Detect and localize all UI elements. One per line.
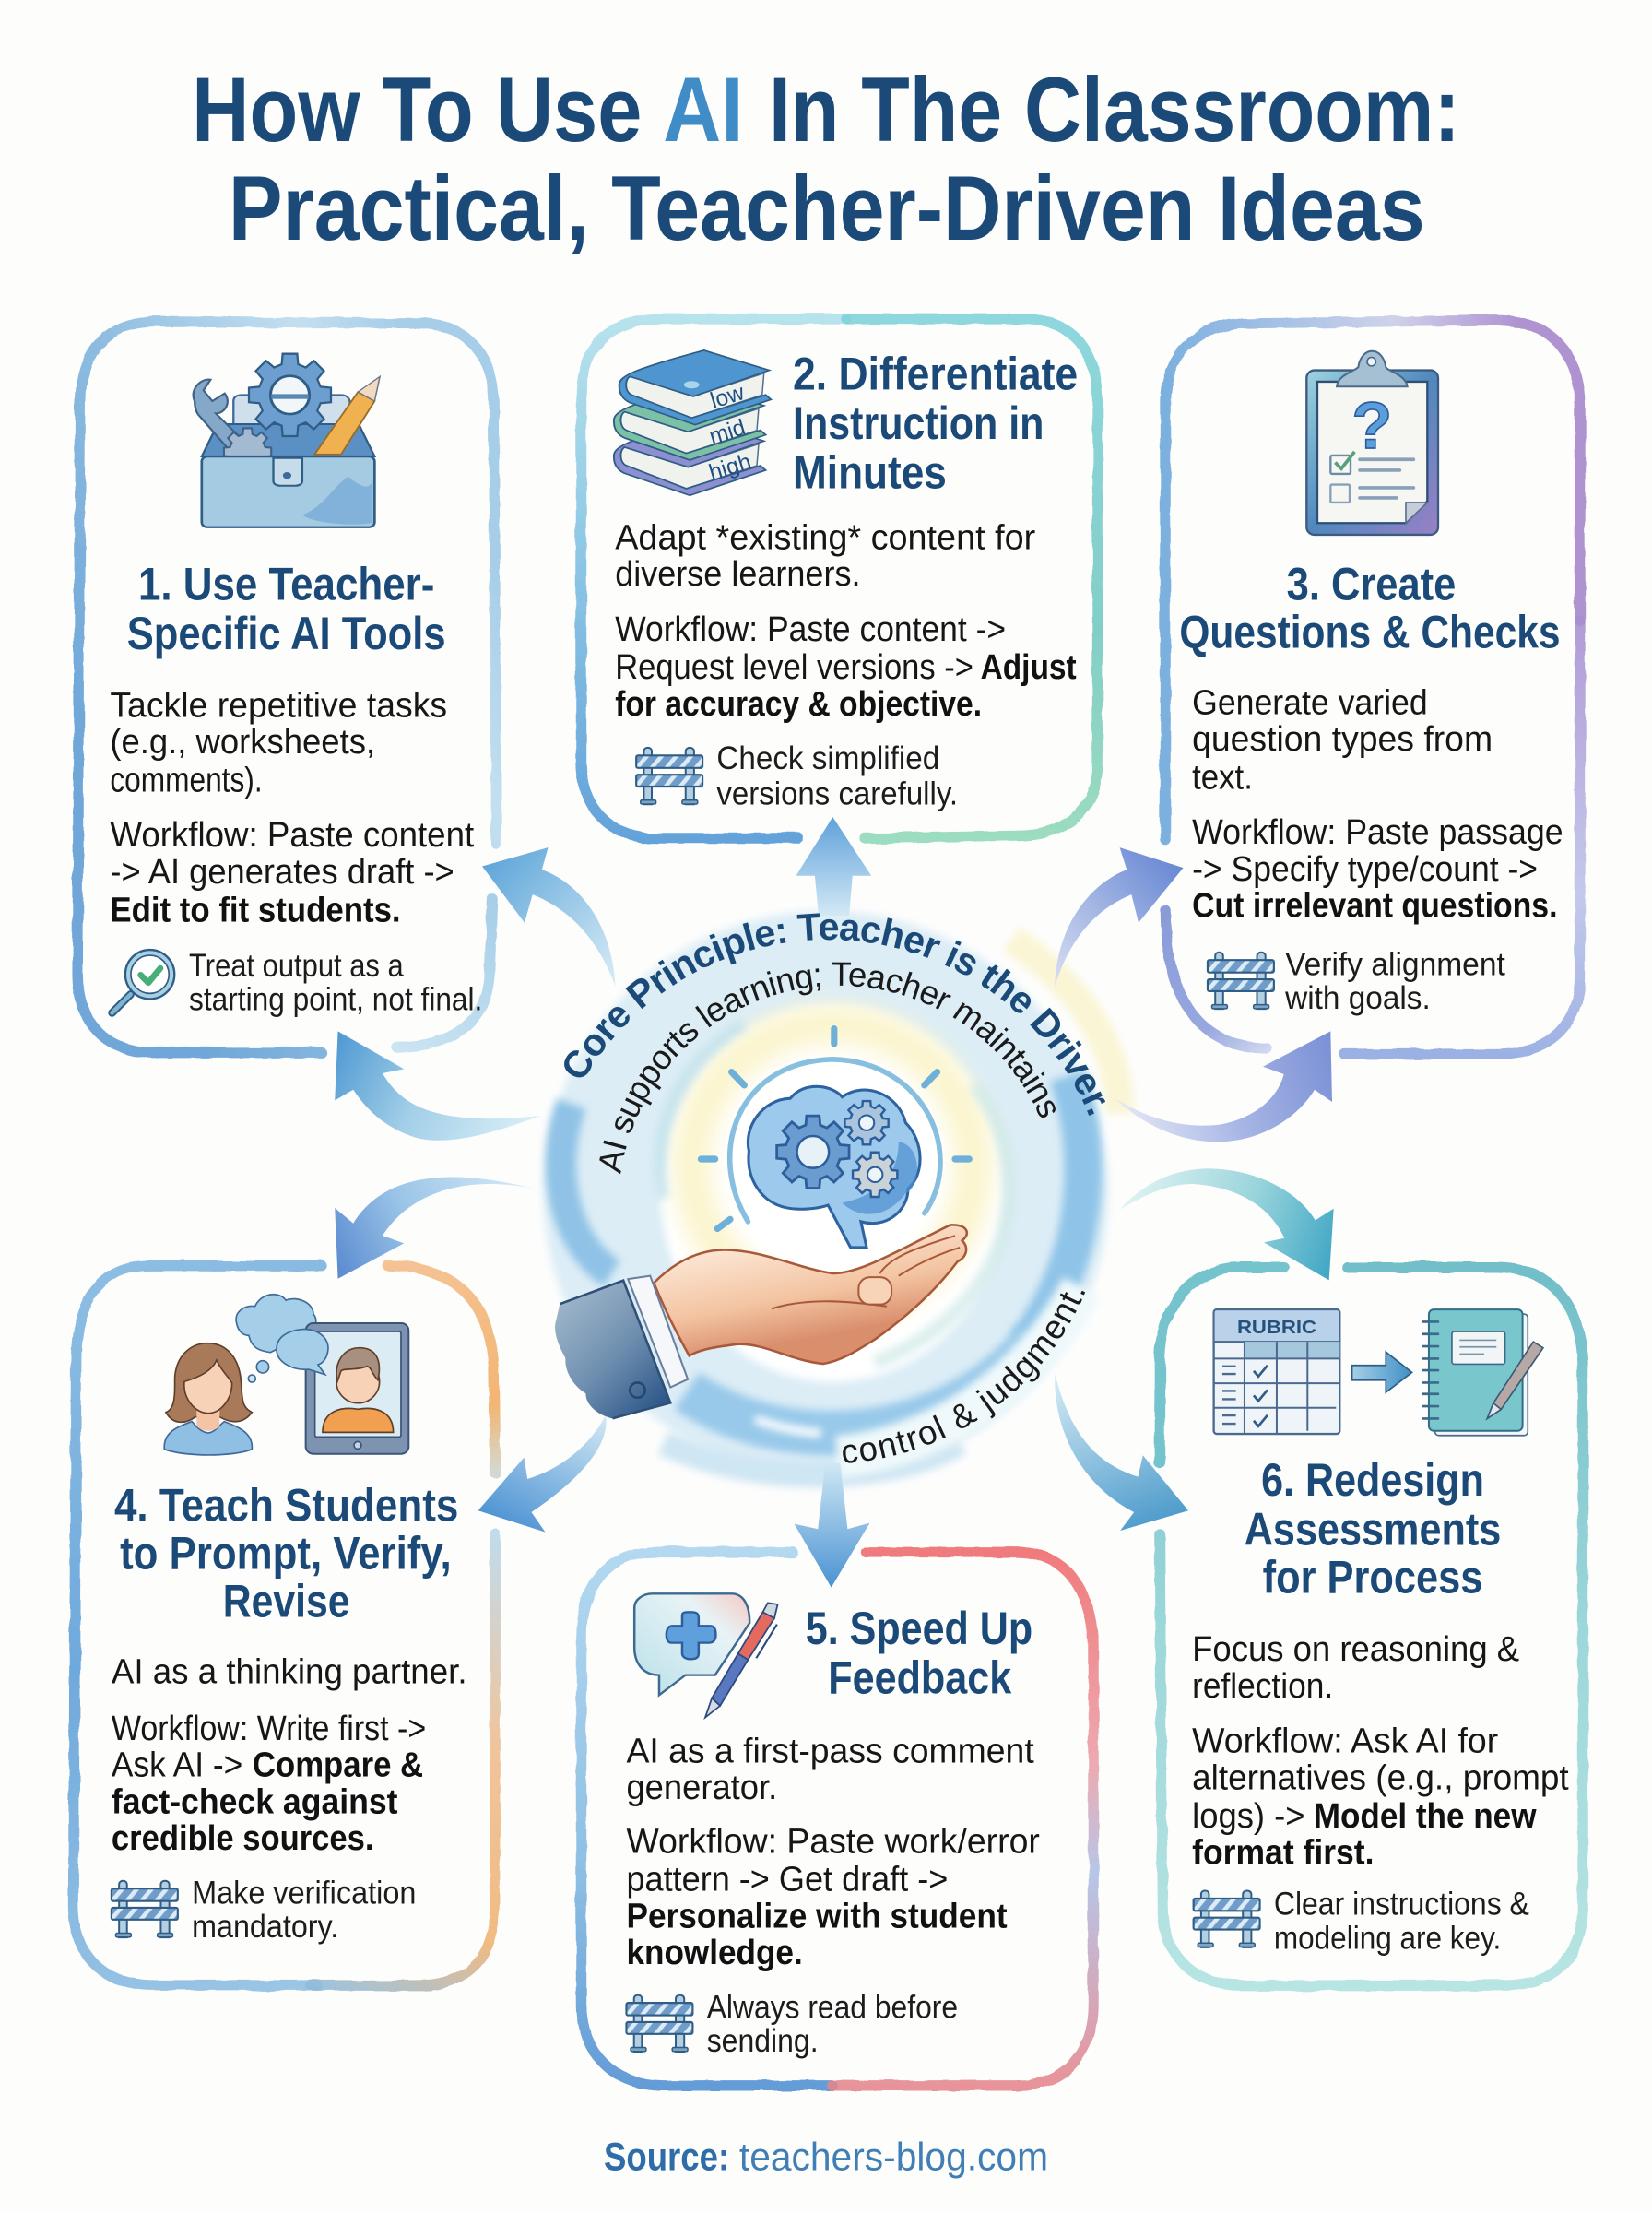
panel 2: differentiate instruction [581,319,1098,838]
arrow to panel 6 bottom [1055,1374,1188,1531]
workflow: Ask AI -> [112,1746,242,1785]
note [1274,1887,1529,1956]
workflow: Workflow: Ask AI for [1192,1722,1498,1761]
icon: stacked books: high [706,449,754,486]
workflow: fact-check against [112,1781,398,1821]
workflow: Edit to fit students. [110,890,401,929]
description: generator. [626,1768,777,1807]
panel 6: redesign assessments [1160,1267,1583,1985]
arrow to panel 4 bottom [478,1415,607,1533]
heading [1179,557,1561,657]
description: AI as a first-pass comment [626,1731,1034,1770]
icon: rubric to notebook [1214,1309,1543,1436]
note: sending. [707,2023,819,2059]
icon: barrier [112,1881,178,1937]
heading: Feedback [828,1651,1012,1703]
note [1284,946,1505,1016]
arrow to panel 5 [795,1463,869,1588]
core principle text lower arc: control & judgment. [843,1291,1086,1463]
note: modeling are key. [1274,1920,1501,1956]
source line: Source: [604,2136,729,2180]
icon: clipboard with question [1306,351,1438,535]
heading: Minutes [793,445,947,498]
heading [793,347,1078,498]
workflow [1192,1722,1569,1873]
heading: to Prompt, Verify, [120,1527,452,1580]
workflow: pattern -> Get draft -> [626,1860,948,1899]
description [1192,682,1493,797]
icon: barrier [626,1995,692,2052]
description: text. [1192,757,1253,797]
workflow: Model the new [1314,1796,1537,1836]
arrow to panel 3 top [1055,847,1184,987]
heading: for Process [1263,1551,1482,1604]
arrows from hub to panels [335,817,1334,1588]
icon: stacked books: mid [706,415,749,449]
description: reflection. [1192,1666,1333,1706]
arrow to panel 4 top [335,1178,537,1279]
icon: open hand and cuff [555,1225,967,1418]
note [707,1989,958,2059]
description: Tackle repetitive tasks [110,685,447,725]
workflow: -> AI generates draft -> [110,852,454,892]
workflow: -> Specify type/count -> [1192,849,1538,889]
workflow: for accuracy & objective. [615,684,982,724]
heading: Instruction in [793,396,1044,449]
description: AI as a thinking partner. [112,1652,467,1692]
icon: barrier [1208,953,1274,1009]
note: Verify alignment [1285,946,1505,982]
heading: Specific AI Tools [127,607,446,659]
title: AI [663,59,743,161]
source line: teachers-blog.com [739,2136,1048,2180]
icon: brain with gears [748,1086,920,1248]
note: Clear instructions & [1274,1887,1529,1923]
panel 4: teach students [74,1266,495,1985]
description: comments). [110,761,263,800]
icon: stacked books: low [707,380,748,414]
workflow [1192,812,1564,926]
heading: 1. Use Teacher- [138,557,434,609]
note: Make verification [192,1875,416,1911]
workflow: Workflow: Paste passage [1192,812,1564,852]
description: question types from [1192,719,1493,759]
workflow: Request level versions -> [615,647,974,687]
icon: feedback bubble and pen [634,1593,778,1718]
title [192,59,1460,260]
heading: 6. Redesign [1261,1453,1484,1506]
icon: clipboard with question: ? [1351,389,1392,463]
workflow: Adjust [981,647,1077,687]
heading: 3. Create [1287,557,1456,609]
panel 3: questions and checks [1165,320,1580,1054]
note [189,948,482,1018]
workflow [110,815,475,929]
workflow: Personalize with student [626,1896,1008,1935]
note: mandatory. [192,1909,338,1945]
workflow: credible sources. [112,1818,374,1858]
heading: Assessments [1245,1503,1501,1556]
description [1192,1629,1519,1706]
note [192,1875,416,1945]
workflow: Workflow: Paste content [110,815,475,855]
workflow: logs) -> [1192,1796,1305,1836]
workflow [112,1709,426,1858]
note: versions carefully. [716,775,958,811]
heading [1245,1453,1501,1604]
note: starting point, not final. [189,982,482,1018]
description: Focus on reasoning & [1192,1629,1519,1669]
note: Treat output as a [189,948,404,984]
halo arc and rays [701,1029,969,1229]
heading: 5. Speed Up [806,1602,1032,1654]
panel 1: teacher-specific tools [77,322,497,1053]
brain and hand illustration [555,1029,969,1418]
description [626,1731,1034,1807]
note: with goals. [1284,980,1431,1016]
note: Check simplified [716,740,939,776]
title: How To Use [192,59,642,161]
workflow [626,1821,1040,1972]
workflow: knowledge. [626,1933,803,1972]
workflow [615,609,1077,724]
panel 5: speed up feedback [581,1552,1093,2086]
description [110,685,447,800]
icon: student and tablet with speech bubbles [164,1295,408,1455]
icon: magnifier with check [112,950,174,1012]
workflow: Workflow: Write first -> [112,1709,426,1748]
note [716,740,958,811]
arrow to panel 2 [796,817,871,916]
core principle text upper arc: AI supports learning; Teacher maintains [599,963,1056,1175]
core principle heading on arc: Core Principle: Teacher is the Driver. [564,913,1105,1116]
description: Generate varied [1192,682,1428,722]
icon: barrier [1194,1890,1260,1947]
heading: Questions & Checks [1179,605,1561,657]
title: Practical, Teacher-Driven Ideas [229,158,1425,260]
workflow: Workflow: Paste work/error [626,1821,1040,1861]
workflow: Compare & [253,1746,423,1785]
title: In The Classroom: [769,59,1460,161]
description: Adapt *existing* content for [615,517,1035,557]
central hub: watercolor swirl [543,911,1120,1475]
note: Always read before [707,1989,958,2025]
description: (e.g., worksheets, [110,722,375,762]
arrow to panel 6 top [1120,1168,1334,1280]
heading: 4. Teach Students [114,1479,458,1532]
heading: 2. Differentiate [793,347,1078,399]
heading [806,1602,1032,1703]
icon: toolbox with gear, wrench, pencil [194,354,380,527]
description [615,517,1035,594]
workflow: Workflow: Paste content -> [615,609,1006,649]
arrow to panel 3 bottom [1115,1031,1332,1142]
icon: stacked books [614,350,771,495]
icon: rubric to notebook: RUBRIC [1237,1317,1316,1338]
source line [604,2136,1048,2180]
workflow: Cut irrelevant questions. [1192,886,1557,926]
arrow to panel 1 bottom [335,1031,541,1141]
description: diverse learners. [615,554,860,594]
heading [114,1479,458,1627]
workflow: alternatives (e.g., prompt [1192,1757,1569,1797]
heading [127,557,446,659]
arrow to panel 1 top [482,847,616,987]
icon: barrier [636,748,702,804]
workflow: format first. [1192,1833,1375,1873]
heading: Revise [223,1575,350,1627]
